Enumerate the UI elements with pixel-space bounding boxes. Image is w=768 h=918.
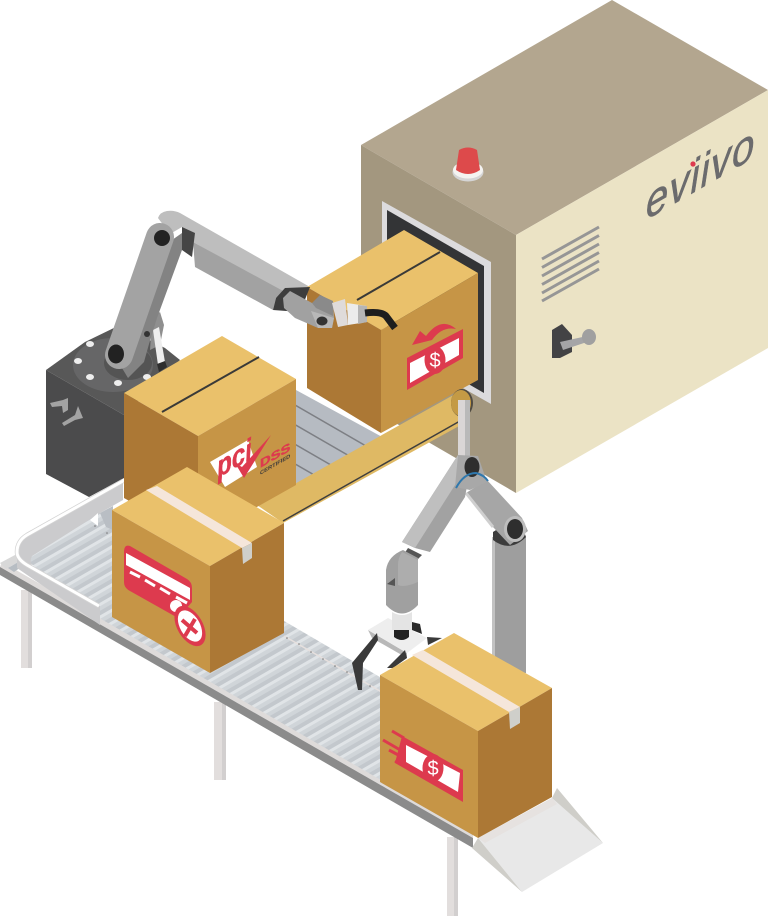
exit ramp [472,788,603,892]
packing tape [146,486,252,548]
elbow joint to post [493,516,526,546]
icon: refund banknote [407,324,463,390]
machine left face [361,145,516,493]
icon: refund banknote: $ [429,350,441,372]
roller back edge [284,636,385,694]
packing tape [412,650,520,712]
loading window [382,201,491,404]
icon: fast banknote [383,731,463,802]
robot arm: piston [150,312,167,372]
PCI DSS badge: CERTIFIED [260,453,290,477]
flange bolts [74,341,151,386]
vertical support rod [458,400,470,458]
robot arm: lower section [108,230,182,378]
arm joint gear: bottom [108,344,124,364]
gripper plate [368,618,427,658]
wrist collar [392,612,412,630]
forearm to post [466,480,528,545]
box: declined card [112,467,284,673]
PCI DSS badge: pci [215,433,254,485]
machine top face [361,0,768,235]
guide rail tip [90,513,98,526]
eviivo logo: eviivo [646,115,754,230]
roller bolts [94,525,371,687]
ventilation grille [542,227,599,301]
icon: declined card [124,546,206,653]
PCI DSS badge [210,433,290,487]
icon: fast banknote: $ [427,758,439,780]
robot arm: gripper head [273,287,395,328]
arm joint gear: top [154,230,170,246]
tape line [357,252,440,300]
yellow conveyor side rail [257,389,473,523]
support post [492,537,526,673]
side rail [0,562,473,838]
PCI DSS badge: DSS [260,439,290,471]
box: payment out [380,633,552,838]
second conveyor bed [255,390,470,505]
machine cabinet [361,0,768,493]
packing robot arm [352,455,528,690]
wrist cylinder [386,550,418,614]
curved guide rail [17,481,123,625]
main roller conveyor [0,481,473,848]
hinge [455,455,487,490]
roller bed [22,512,385,792]
flange shadow [104,346,152,380]
conveyor legs [21,590,458,916]
tape line [162,357,259,412]
base latches [50,398,83,426]
gripper cable [365,312,395,328]
box: returned payment [307,230,478,433]
machine right face [516,90,768,493]
gripper claws [352,633,378,690]
dark robot base [46,325,180,497]
robot arm: upper section [158,211,310,310]
gripper collar [332,299,348,327]
machine lever [552,324,596,358]
blue hoses [456,473,488,488]
robot flange [73,338,153,392]
warning light [452,148,484,182]
box: PCI DSS certified [124,336,296,540]
upper arm [402,455,470,552]
